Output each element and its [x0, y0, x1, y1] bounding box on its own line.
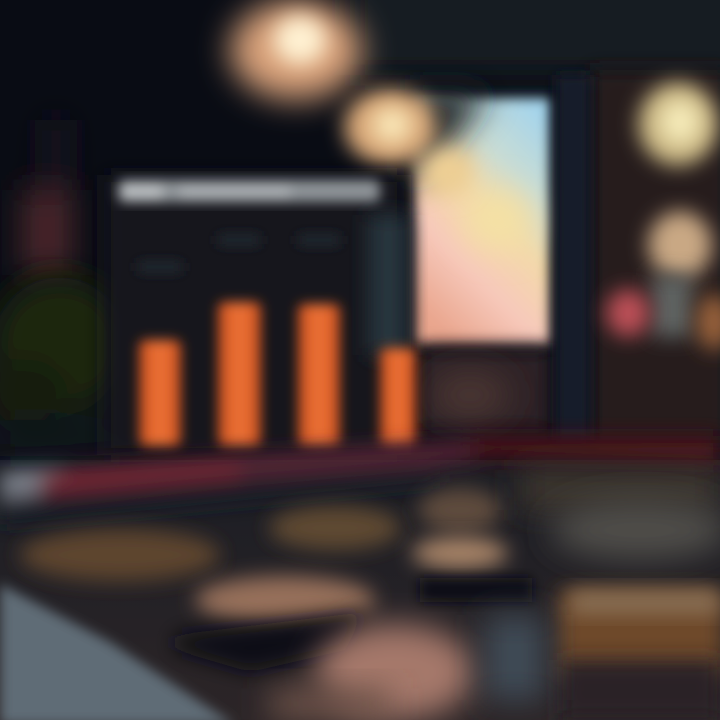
window: [405, 90, 550, 430]
column: [556, 75, 590, 440]
red counter strip: [0, 436, 720, 525]
tables: [20, 470, 720, 720]
chart title: [118, 180, 380, 202]
faint labels above the bars: [138, 235, 340, 272]
wall lights and decor on the right: [606, 82, 720, 350]
chart panel: [104, 175, 416, 455]
hanging lamps: [230, 0, 474, 196]
bar chart: [139, 302, 416, 446]
flag on the left wall: [22, 120, 72, 275]
grey foreground ledge: [0, 584, 235, 720]
floor reflections: [270, 615, 545, 720]
plant: [0, 277, 130, 456]
